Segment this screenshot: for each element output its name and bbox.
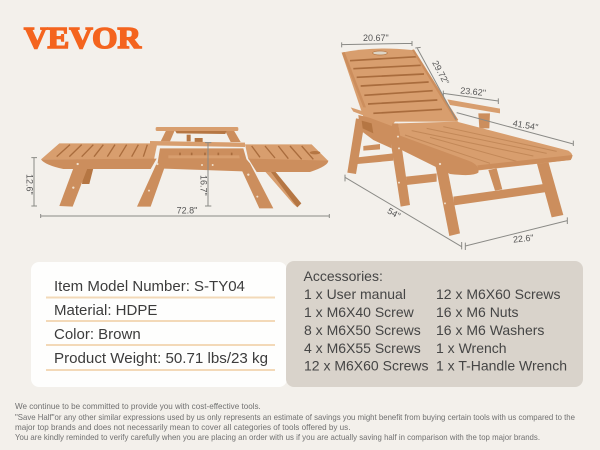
3D view of lounger with dimensions [342,33,573,250]
near armrest and bracket [358,115,393,148]
seat [398,122,572,171]
disclaimer text: "Save Half"or any other similar expressions used by us only represents an estimate of savings you might benefit from buying certain tools with us compared to the [15,413,575,422]
bolts [397,136,446,204]
back legs [537,162,563,217]
far armrest [478,113,490,128]
accessories right column: 12 x M6X60 Screws [436,286,560,302]
front legs [392,123,410,207]
disclaimer text: We continue to be committed to provide you with cost-effective tools. [15,402,261,411]
dimension 29.72: 29.72" [430,59,451,86]
left deck [41,143,157,159]
dimension 41.54 [457,113,573,146]
dimension 16.7: 16.7" [198,175,208,196]
dimension 22.6: 22.6" [512,233,534,245]
logo: VEVOR: VEVOR [24,20,142,55]
dimension 20.67 [342,33,412,47]
accessories heading: Accessories: [304,268,383,284]
legs [59,159,91,207]
accessories right column: 16 x M6 Nuts [436,304,518,320]
disclaimer text [15,402,575,442]
disclaimer text: major top brands and does not necessarily mean to cover all categories of tools offered by us. [15,423,350,432]
dimension 72.8 [41,206,329,218]
backrest [342,48,458,122]
accessories left column: 8 x M6X50 Screws [304,322,421,338]
rear folded leg [265,172,301,207]
accessories right column: 1 x Wrench [436,340,507,356]
side view of flat lounger with dimensions [24,127,329,218]
side table [161,131,175,141]
spec: model number: Item Model Number: S-TY04 [54,278,245,295]
right deck [245,144,328,161]
dimension 23.62 [443,85,498,104]
dimension 12.6: 12.6" [24,174,34,195]
spec: weight: Product Weight: 50.71 lbs/23 kg [54,350,268,367]
accessories left column [304,286,428,374]
bolts [72,163,258,198]
dimension 54 [345,175,462,249]
accessories left column: 4 x M6X55 Screws [304,340,421,356]
centre frame [157,148,250,172]
panel: product specs [31,262,287,387]
seat side rail [398,135,479,175]
disclaimer text: You are kindly reminded to verify carefully when you are placing an order with us if you are actually saving half in comparison with the top major brands. [15,433,540,442]
accessories right column: 16 x M6 Washers [436,322,544,338]
dimension 22.6 [465,217,567,250]
accessories left column: 1 x M6X40 Screw [304,304,415,320]
dimension 54: 54" [386,206,402,221]
armrest [150,141,245,147]
accessories right column: 1 x T-Handle Wrench [436,358,567,374]
dimension 29.72 [415,47,456,119]
spec: color: Color: Brown [54,326,141,343]
dimension 72.8: 72.8" [177,206,197,216]
accessories left column: 12 x M6X60 Screws [304,358,428,374]
dimension 23.62: 23.62" [460,85,486,98]
dimension 41.54: 41.54" [512,118,539,132]
dimension 16.7 [198,143,211,206]
dimension 20.67: 20.67" [363,33,389,43]
spec: material: Material: HDPE [54,302,157,319]
panel: accessories [286,261,583,387]
accessories right column [436,286,567,374]
dimension 12.6 [24,158,37,206]
accessories left column: 1 x User manual [304,286,406,302]
